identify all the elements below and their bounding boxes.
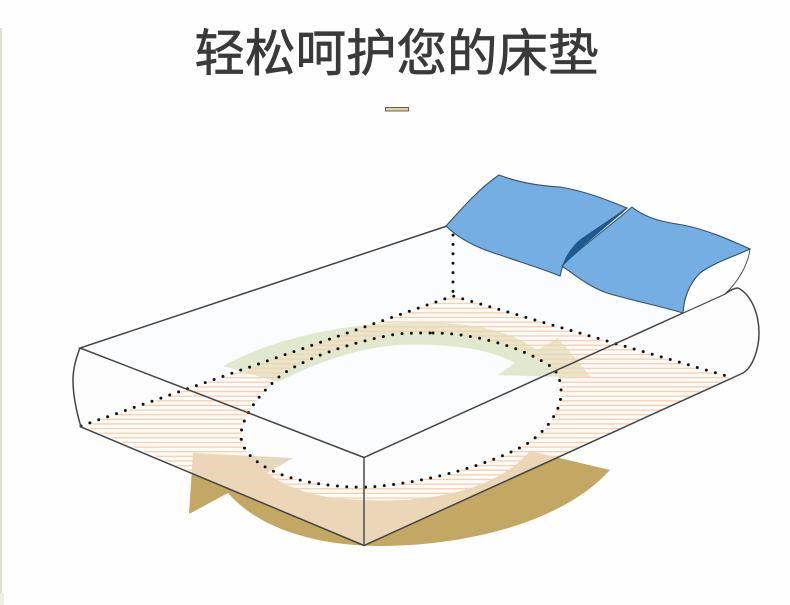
left edge strip: [0, 28, 4, 605]
pillow gap shadow: [560, 208, 628, 276]
left pillow: [446, 175, 627, 276]
dotted inner loop: [241, 333, 561, 487]
mattress outline: [73, 226, 759, 546]
mattress translucent volume: [73, 226, 759, 545]
title: 轻松呵护您的床垫: [194, 25, 598, 82]
hatched air layer: [84, 296, 730, 545]
arrow: upper green circulation arrow: [223, 322, 592, 382]
mattress top face: [80, 226, 738, 458]
pillow seam shadow: [563, 208, 628, 266]
right pillow: [562, 207, 750, 313]
mattress body: [73, 226, 759, 545]
right pillow end: [683, 249, 750, 313]
title accent bar: [386, 108, 408, 111]
dotted plane outline: [81, 296, 730, 426]
arrow: lower tan circulation arrow: [189, 451, 610, 546]
dotted circulation path: [81, 235, 730, 487]
dotted vertical corner: [452, 235, 454, 296]
pillows: [446, 175, 750, 313]
